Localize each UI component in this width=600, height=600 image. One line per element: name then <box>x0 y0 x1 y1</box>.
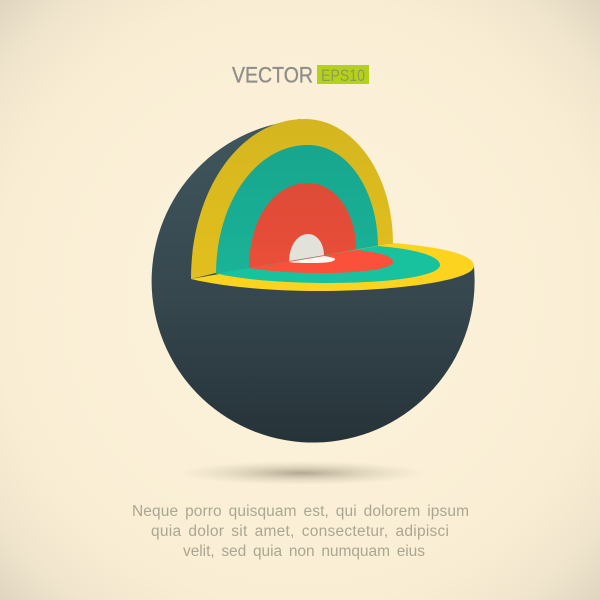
teal mantle wall <box>216 145 378 274</box>
cutaway sphere <box>152 119 475 443</box>
caption line 1: Neque porro quisquam est, qui dolorem ipsum <box>132 503 469 520</box>
dark outer shell <box>152 119 475 443</box>
yellow crust floor <box>191 243 474 291</box>
heading: VECTOR EPS10 <box>232 62 369 88</box>
heading word: VECTOR <box>232 62 313 88</box>
white inner core wall <box>289 234 324 262</box>
ground shadow <box>178 461 426 485</box>
red outer core floor <box>249 250 393 273</box>
teal mantle floor <box>216 246 440 283</box>
caption line 2: quia dolor sit amet, consectetur, adipisci <box>151 523 449 540</box>
badge: EPS10: EPS10 <box>321 66 365 85</box>
red outer core wall <box>249 183 356 268</box>
caption text <box>132 503 469 560</box>
caption line 3: velit, sed quia non numquam eius <box>183 543 425 560</box>
white inner core floor <box>289 256 335 263</box>
yellow crust wall <box>191 119 393 279</box>
